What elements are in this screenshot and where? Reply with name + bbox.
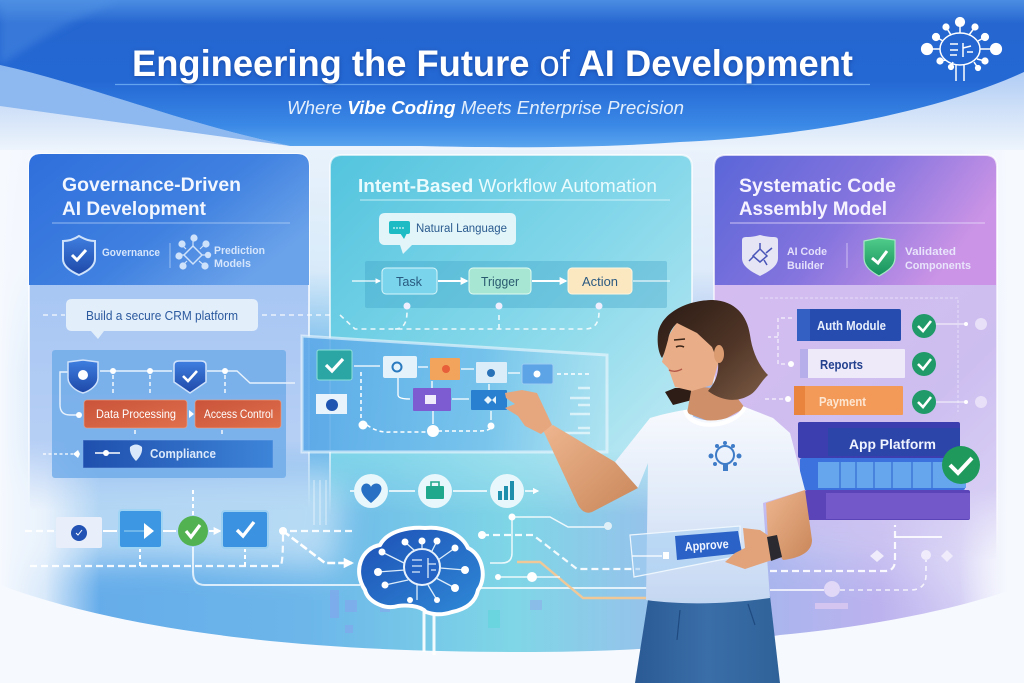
- module: Auth Module: Auth Module: [817, 319, 886, 333]
- panel 1 header background: [29, 154, 309, 285]
- panel: systematic code assembly model: [714, 155, 997, 560]
- pointing hand: [505, 390, 552, 434]
- icon: AI code builder shield: [742, 235, 778, 276]
- node: blue play box: [119, 510, 162, 548]
- hair: [658, 300, 768, 400]
- box: Action: Action: [582, 275, 618, 289]
- ear: [714, 345, 724, 363]
- label: Prediction Models: Prediction: [214, 245, 265, 257]
- module: Payment: Payment: [819, 395, 867, 409]
- panel: governance-driven AI development: [29, 154, 345, 514]
- node: blue check box: [222, 511, 268, 548]
- t-shirt: [615, 407, 805, 603]
- module: Payment: [794, 386, 903, 415]
- holding hand: [725, 528, 772, 569]
- icon: AI brain logo: [922, 18, 1002, 81]
- smile: [669, 369, 682, 371]
- module: Auth Module: [797, 309, 901, 341]
- box: Data Processing: [84, 400, 187, 428]
- hair strand behind neck: [665, 388, 696, 405]
- node: blue active: [471, 390, 507, 410]
- sub-panel: governance flow: [43, 350, 295, 478]
- face: [662, 322, 722, 391]
- jeans: [635, 596, 780, 683]
- icon: check shield node: [174, 361, 206, 393]
- speech bubble: Natural Language: Natural Language: [416, 223, 507, 235]
- box: Trigger: Trigger: [481, 275, 519, 289]
- label: AI Code Builder: AI Code: [787, 246, 827, 258]
- node: white: [383, 356, 417, 378]
- button: Approve: Approve: [684, 537, 729, 554]
- box: Compliance: [83, 440, 273, 468]
- speech bubble: Build a secure CRM platform: Build a secure CRM platform: [86, 309, 238, 323]
- module: Reports: Reports: [820, 358, 863, 372]
- box: Task: Task: [396, 275, 423, 289]
- box: Access Control: [195, 400, 281, 428]
- icon: briefcase: [418, 474, 452, 508]
- icon: validated shield: [864, 238, 895, 276]
- heading: Governance-Driven AI Development: AI Development: [62, 199, 207, 220]
- workflow band: task trigger action: [352, 261, 670, 308]
- box: Data Processing: Data Processing: [96, 407, 176, 421]
- module: Reports: [800, 349, 905, 378]
- label: Validated Components: Components: [905, 260, 971, 272]
- label: Validated Components: Validated: [905, 246, 956, 258]
- node: white round: [476, 362, 507, 383]
- stack: App Platform layers: [798, 422, 980, 520]
- icon: heart: [354, 474, 388, 508]
- node: small badge: [316, 394, 347, 414]
- speech bubble: Build a secure CRM platform: [66, 299, 258, 339]
- label: Governance: Governance: [102, 247, 160, 259]
- box: Trigger: [469, 268, 531, 294]
- icon: bar chart: [490, 474, 524, 508]
- icon: governance shield: [63, 236, 95, 275]
- label: Prediction Models: Models: [214, 258, 251, 270]
- box: Task: [382, 268, 437, 294]
- watch: [767, 535, 782, 561]
- figure: woman presenting: [505, 300, 812, 683]
- check badges: [912, 314, 936, 414]
- panel: intent-based workflow automation: [302, 155, 692, 525]
- box: Action: [568, 268, 632, 294]
- icon: round shield node: [68, 360, 98, 393]
- icon: teal check: [317, 350, 352, 380]
- panel 3 header background: [714, 155, 997, 285]
- faint data blocks: [330, 590, 542, 633]
- icon: central AI brain: [359, 528, 483, 655]
- approve glass pane: [630, 526, 742, 577]
- title underline: [115, 84, 870, 86]
- pointing arm: [543, 425, 638, 513]
- holding arm: [766, 490, 812, 560]
- node: purple: [413, 388, 451, 411]
- subtitle: Where Vibe Coding Meets Enterprise Precision: [287, 98, 684, 118]
- title: Engineering the Future of AI Development: [132, 42, 853, 84]
- node: orange: [430, 358, 460, 380]
- eye and brow: [674, 339, 685, 347]
- logo on shirt: [708, 441, 742, 471]
- speech bubble: Natural Language: [379, 213, 516, 254]
- box: Compliance: Compliance: [150, 447, 216, 461]
- top banner: [0, 0, 1024, 150]
- icon: prediction models network: [176, 235, 211, 269]
- node: white check box: [56, 517, 102, 548]
- heading: Intent-Based Workflow Automation: Intent-Based Workflow Automation: [358, 176, 657, 196]
- glass workflow screen: [302, 336, 607, 452]
- icon row: heart, briefcase, chart: [350, 474, 538, 508]
- heading: Governance-Driven AI Development: Governance-Driven: [62, 175, 241, 196]
- bottom pipeline flow: [25, 490, 953, 633]
- badge: large check: [942, 446, 980, 484]
- icon: chat: [389, 221, 410, 239]
- node: green check: [178, 516, 208, 546]
- neck: [687, 386, 745, 424]
- heading: Systematic Code Assembly Model: Systematic Code: [739, 176, 896, 197]
- heading: Systematic Code Assembly Model: Assembly Model: [739, 199, 887, 220]
- label: AI Code Builder: Builder: [787, 260, 825, 272]
- node: blue: [522, 364, 553, 384]
- stack: App Platform layers: App Platform: [849, 436, 936, 452]
- box: Access Control: Access Control: [204, 407, 273, 421]
